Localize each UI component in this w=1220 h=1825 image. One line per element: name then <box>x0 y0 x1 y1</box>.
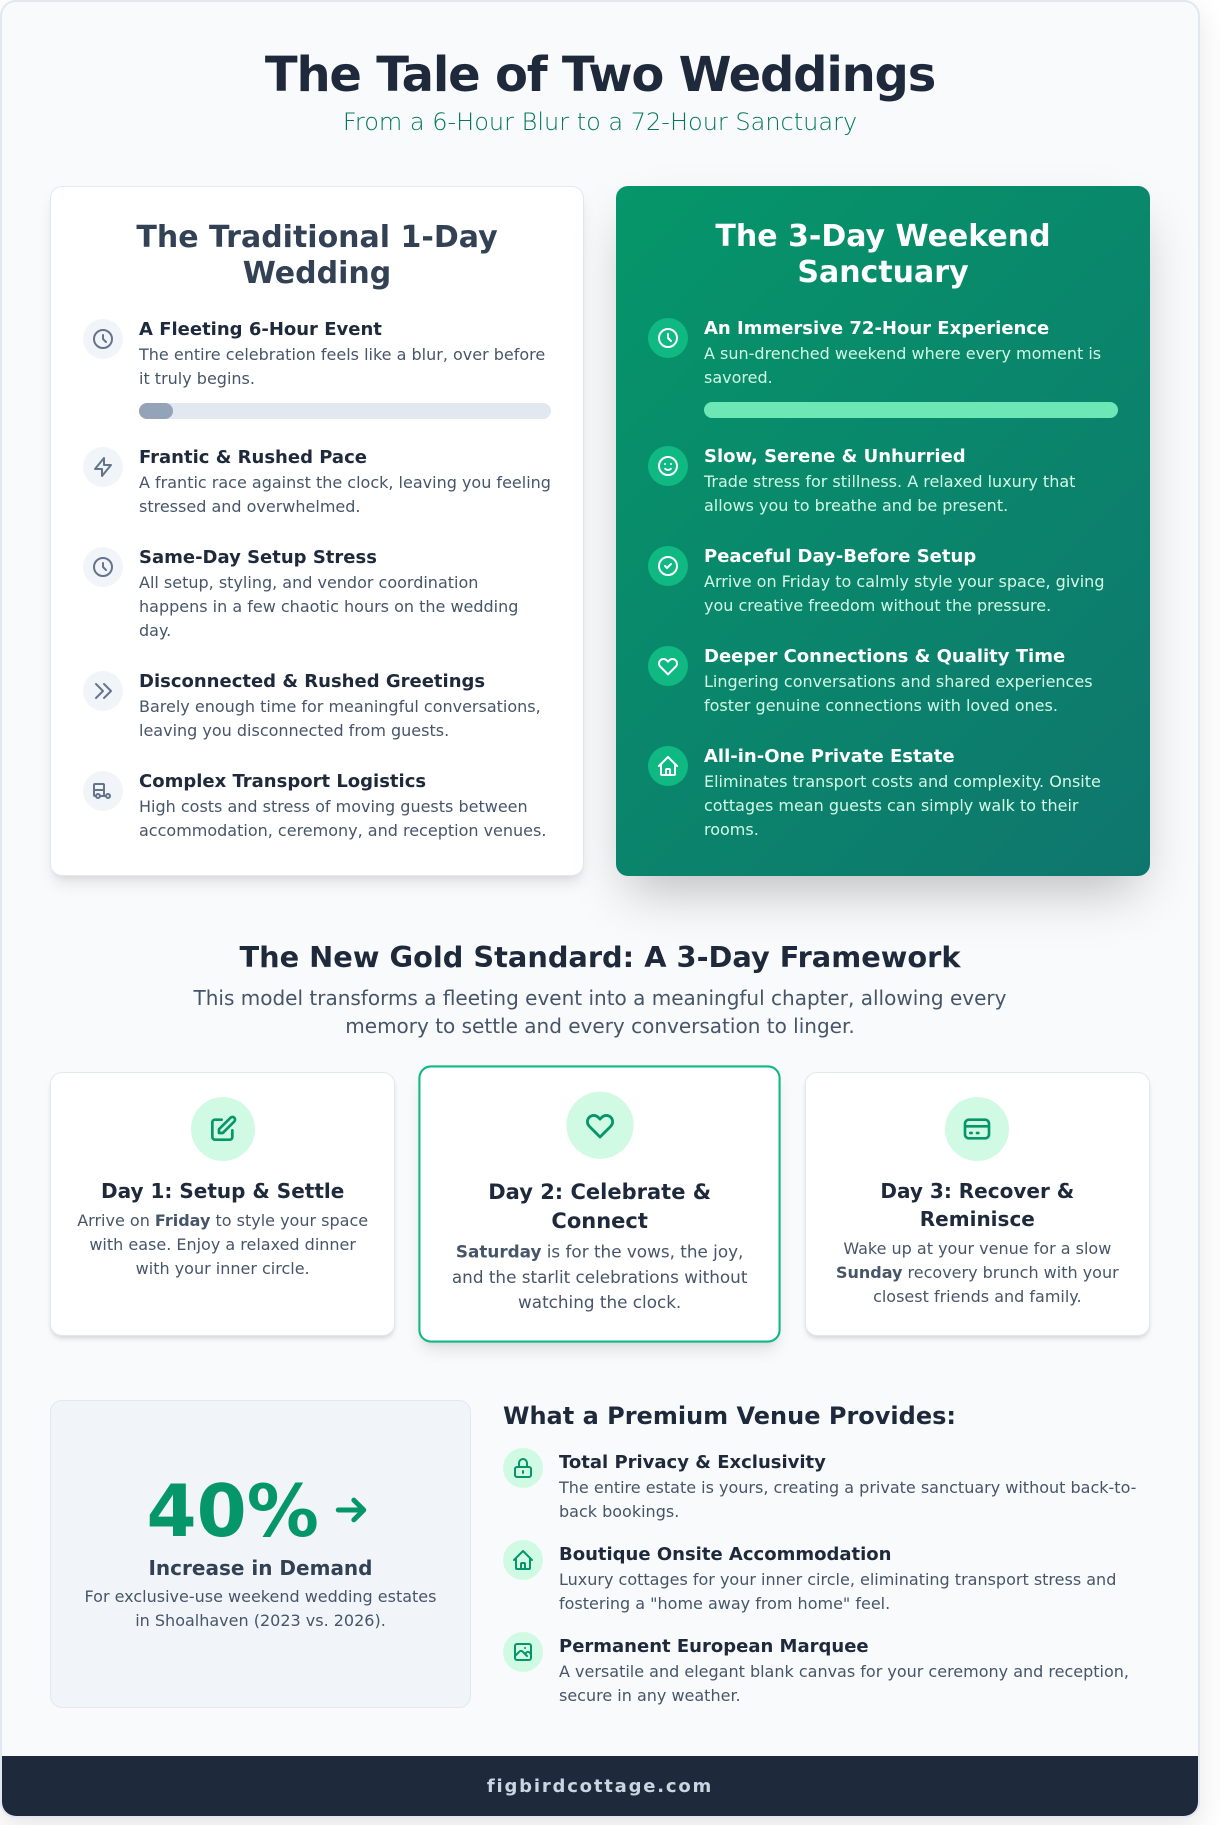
card: day 3: closest friends and family. <box>873 1287 1082 1306</box>
icon: clock <box>648 318 688 358</box>
item: frantic pace: Frantic & Rushed Pace <box>139 446 367 468</box>
item: frantic pace: A frantic race against the clock, leaving you feeling <box>139 473 551 492</box>
item: fleeting event: The entire celebration feels like a blur, over before <box>139 345 545 364</box>
icon: pencil <box>191 1097 255 1161</box>
icon: smile <box>648 446 688 486</box>
card: day 3: Wake up at your venue for a slow <box>843 1239 1111 1258</box>
item: immersive experience: An Immersive 72-Hour Experience <box>704 318 1049 338</box>
icon: arrow right <box>336 1498 366 1522</box>
item: accommodation: Boutique Onsite Accommodation <box>559 1544 891 1565</box>
card: day 3: Sunday recovery brunch with your <box>836 1263 1119 1282</box>
card: day 2 highlighted: Connect <box>552 1208 648 1233</box>
item: setup stress: All setup, styling, and vendor coordination <box>139 573 478 592</box>
item: accommodation: fostering a "home away from home" feel. <box>559 1594 890 1613</box>
icon: heart <box>566 1092 634 1159</box>
footer: figbirdcottage.com <box>487 1776 713 1797</box>
icon: home <box>503 1540 543 1580</box>
icon: clock <box>83 319 123 359</box>
section intro text: This model transforms a fleeting event into a meaningful chapter, allowing every <box>194 986 1006 1010</box>
item: setup stress: day. <box>139 621 171 640</box>
item: immersive experience: A sun-drenched weekend where every moment is <box>704 344 1101 363</box>
card: day 2 highlighted: watching the clock. <box>518 1292 682 1312</box>
icon: credit card <box>945 1097 1009 1161</box>
item: rushed greetings: leaving you disconnected from guests. <box>139 721 449 740</box>
card: day 2 highlighted <box>419 1065 781 1343</box>
item: accommodation <box>503 1540 1116 1613</box>
item: accommodation: Luxury cottages for your inner circle, eliminating transport stress and <box>559 1570 1116 1589</box>
item: marquee: Permanent European Marquee <box>559 1636 869 1657</box>
item: rushed greetings: Disconnected & Rushed Greetings <box>139 670 485 692</box>
item: transport logistics: accommodation, ceremony, and reception venues. <box>139 821 546 840</box>
stat description <box>85 1587 436 1630</box>
title: The Tale of Two Weddings <box>265 46 935 102</box>
section intro text: memory to settle and every conversation to linger. <box>345 1014 855 1038</box>
item: peaceful setup: Arrive on Friday to calmly style your space, giving <box>704 572 1104 591</box>
stat label: Increase in Demand <box>148 1556 372 1580</box>
item: setup stress: Same-Day Setup Stress <box>139 546 377 568</box>
panel: 40% stat <box>50 1400 471 1708</box>
progress bar: 6 of 72 hours <box>139 403 551 419</box>
card: day 2 highlighted: Day 2: Celebrate & <box>489 1178 711 1204</box>
item: slow and serene: Slow, Serene & Unhurried <box>704 446 966 466</box>
card: day 1: with ease. Enjoy a relaxed dinner <box>89 1234 356 1254</box>
item: immersive experience <box>648 318 1118 418</box>
item: transport logistics: Complex Transport Logistics <box>139 770 426 792</box>
icon: lock <box>503 1448 543 1488</box>
subtitle: From a 6-Hour Blur to a 72-Hour Sanctuary <box>343 108 857 136</box>
item: deeper connections <box>648 646 1093 715</box>
icon: home <box>648 746 688 786</box>
item: private estate: rooms. <box>704 820 759 839</box>
card: day 1 <box>50 1072 395 1336</box>
item: marquee: A versatile and elegant blank canvas for your ceremony and reception, <box>559 1662 1129 1681</box>
item: fleeting event: it truly begins. <box>139 369 255 388</box>
icon: double chevron <box>83 671 123 711</box>
item: setup stress: happens in a few chaotic hours on the wedding <box>139 597 518 616</box>
big number: 40% <box>146 1469 319 1553</box>
card: day 1: Day 1: Setup & Settle <box>101 1178 344 1202</box>
panel: premium venue features <box>503 1402 1136 1705</box>
stat description: For exclusive-use weekend wedding estates <box>85 1587 436 1606</box>
item: slow and serene: Trade stress for stillness. A relaxed luxury that <box>704 472 1075 491</box>
section heading: framework: The New Gold Standard: A 3-Day Framework <box>239 940 961 974</box>
heading: traditional wedding: The Traditional 1-Day <box>136 220 498 255</box>
heading: premium venue: What a Premium Venue Provides: <box>503 1402 956 1430</box>
item: setup stress <box>83 546 518 640</box>
card: day 3: Reminisce <box>920 1206 1035 1230</box>
icon: clock <box>83 547 123 587</box>
panel: 3-day weekend sanctuary <box>616 186 1150 876</box>
icon: image <box>503 1632 543 1672</box>
card: day 3 <box>805 1072 1150 1336</box>
item: peaceful setup: Peaceful Day-Before Setup <box>704 546 976 566</box>
item: immersive experience: savored. <box>704 368 773 387</box>
heading: traditional wedding: Wedding <box>243 256 391 291</box>
icon: check circle <box>648 546 688 586</box>
item: peaceful setup: you creative freedom without the pressure. <box>704 596 1051 615</box>
footer <box>2 1756 1198 1816</box>
item: peaceful setup <box>648 546 1104 615</box>
item: private estate <box>648 746 1101 839</box>
item: deeper connections: Deeper Connections & Quality Time <box>704 646 1065 666</box>
card: day 2 highlighted: Saturday is for the vows, the joy, <box>456 1241 744 1261</box>
card: day 3: Day 3: Recover & <box>880 1178 1074 1202</box>
section intro text <box>193 986 1006 1038</box>
item: marquee: secure in any weather. <box>559 1686 741 1705</box>
item: rushed greetings: Barely enough time for meaningful conversations, <box>139 697 541 716</box>
item: transport logistics: High costs and stress of moving guests between <box>139 797 528 816</box>
item: frantic pace <box>83 446 551 516</box>
item: fleeting event <box>83 318 551 419</box>
item: slow and serene: allows you to breathe and be present. <box>704 496 1008 515</box>
item: private estate: cottages mean guests can simply walk to their <box>704 796 1078 815</box>
item: privacy: The entire estate is yours, creating a private sanctuary without back-to- <box>559 1478 1136 1497</box>
heading: weekend sanctuary <box>715 219 1051 290</box>
heading: traditional wedding <box>136 220 498 291</box>
heading: weekend sanctuary: The 3-Day Weekend <box>715 219 1051 254</box>
card: day 1: with your inner circle. <box>136 1258 310 1278</box>
heading: weekend sanctuary: Sanctuary <box>797 255 969 290</box>
item: privacy: Total Privacy & Exclusivity <box>559 1452 826 1473</box>
item: rushed greetings <box>83 670 541 740</box>
item: transport logistics <box>83 770 546 840</box>
item: deeper connections: Lingering conversations and shared experiences <box>704 672 1093 691</box>
card: day 1: Arrive on Friday to style your space <box>77 1210 368 1230</box>
item: marquee <box>503 1632 1129 1705</box>
item: privacy <box>503 1448 1136 1521</box>
item: private estate: All-in-One Private Estate <box>704 746 955 766</box>
card: day 2 highlighted: and the starlit celebrations without <box>452 1266 748 1286</box>
stat description: in Shoalhaven (2023 vs. 2026). <box>135 1611 386 1630</box>
item: deeper connections: foster genuine connections with loved ones. <box>704 696 1058 715</box>
panel: traditional 1-day wedding <box>50 186 584 876</box>
item: private estate: Eliminates transport costs and complexity. Onsite <box>704 772 1101 791</box>
icon: lightning <box>83 447 123 487</box>
icon: heart <box>648 646 688 686</box>
progress bar: full 72 hours <box>704 402 1118 418</box>
item: frantic pace: stressed and overwhelmed. <box>139 497 360 516</box>
item: fleeting event: A Fleeting 6-Hour Event <box>139 318 382 340</box>
item: slow and serene <box>648 446 1076 515</box>
icon: truck <box>83 771 123 811</box>
item: privacy: back bookings. <box>559 1502 679 1521</box>
